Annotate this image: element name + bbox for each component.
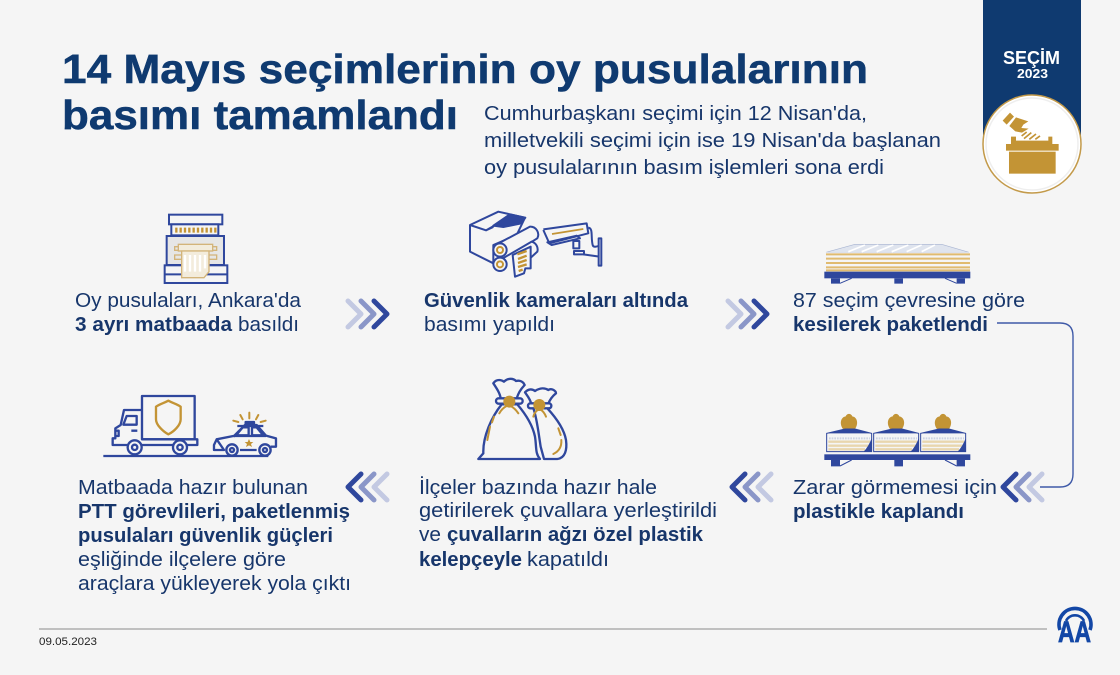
text: step 6: pusulaları güvenlik güçleri (78, 525, 333, 547)
text: step 1: 3 ayrı matbaada (75, 314, 233, 336)
icon: press and security camera (470, 212, 601, 277)
text: step 2: Güvenlik kameraları altında (424, 290, 689, 312)
arrow: step 3 to 4 chevrons (1003, 474, 1042, 500)
text: step 2 (424, 290, 689, 336)
election badge: 2023 (1017, 66, 1048, 81)
title: 14 Mayıs seçimlerinin oy pusulalarının (62, 46, 868, 92)
subtitle: Cumhurbaşkanı seçimi için 12 Nisan'da, (484, 103, 867, 125)
text: step 4: Zarar görmemesi için (793, 477, 997, 499)
arrow: step 4 to 5 (732, 474, 771, 500)
logo: AA (1058, 608, 1091, 649)
title (62, 46, 868, 138)
text: step 6: PTT görevlileri, paketlenmiş (78, 501, 350, 523)
subtitle: oy pusulalarının basım işlemleri sona erdi (484, 157, 884, 179)
text: step 3: 87 seçim çevresine göre (793, 290, 1025, 312)
icon: sacks (478, 379, 566, 459)
text: step 3 (793, 290, 1025, 336)
subtitle: milletvekili seçimi için ise 19 Nisan'da başlanan (484, 130, 941, 152)
title: basımı tamamlandı (62, 92, 458, 138)
logo: AA: AA (1058, 616, 1091, 649)
arrow: step 1 to 2 (348, 301, 387, 327)
arrow: connector step 3 to 4 (997, 323, 1073, 487)
election badge: SEÇİM (1003, 48, 1060, 68)
text: step 6: eşliğinde ilçelere göre (78, 549, 286, 571)
text: step 6 (78, 477, 351, 595)
text: step 5: çuvalların ağzı özel plastik (447, 524, 704, 546)
text: step 5: getirilerek çuvallara yerleştirildi (419, 500, 717, 522)
footer rule (39, 628, 1047, 630)
icon: plastic wrapped packages (824, 414, 970, 466)
icon: printing press (165, 215, 227, 283)
date: 09.05.2023 (39, 636, 97, 648)
text: step 1: Oy pusulaları, Ankara'da (75, 290, 302, 312)
text: step 5 (419, 476, 717, 571)
text: step 5: İlçeler bazında hazır hale (419, 476, 657, 499)
text: step 4: plastikle kaplandı (793, 501, 964, 523)
arrow: step 2 to 3 (728, 301, 767, 327)
text: step 1: basıldı (238, 314, 299, 336)
text: step 6: araçlara yükleyerek yola çıktı (78, 573, 351, 595)
text: step 5: kapatıldı (527, 549, 609, 571)
arrow: step 5 to 6 (348, 474, 387, 500)
icon: truck and police car (103, 396, 276, 456)
subtitle (484, 103, 941, 179)
text: step 3: kesilerek paketlendi (793, 314, 988, 336)
text: step 1 (75, 290, 302, 336)
text: step 4 (793, 477, 997, 523)
text: step 6: Matbaada hazır bulunan (78, 477, 308, 499)
icon: stacked ballot paper on pallet (824, 244, 970, 284)
text: step 5: ve (419, 524, 441, 546)
text: step 5: kelepçeyle (419, 549, 522, 571)
election badge (983, 0, 1081, 193)
text: step 2: basımı yapıldı (424, 314, 555, 336)
